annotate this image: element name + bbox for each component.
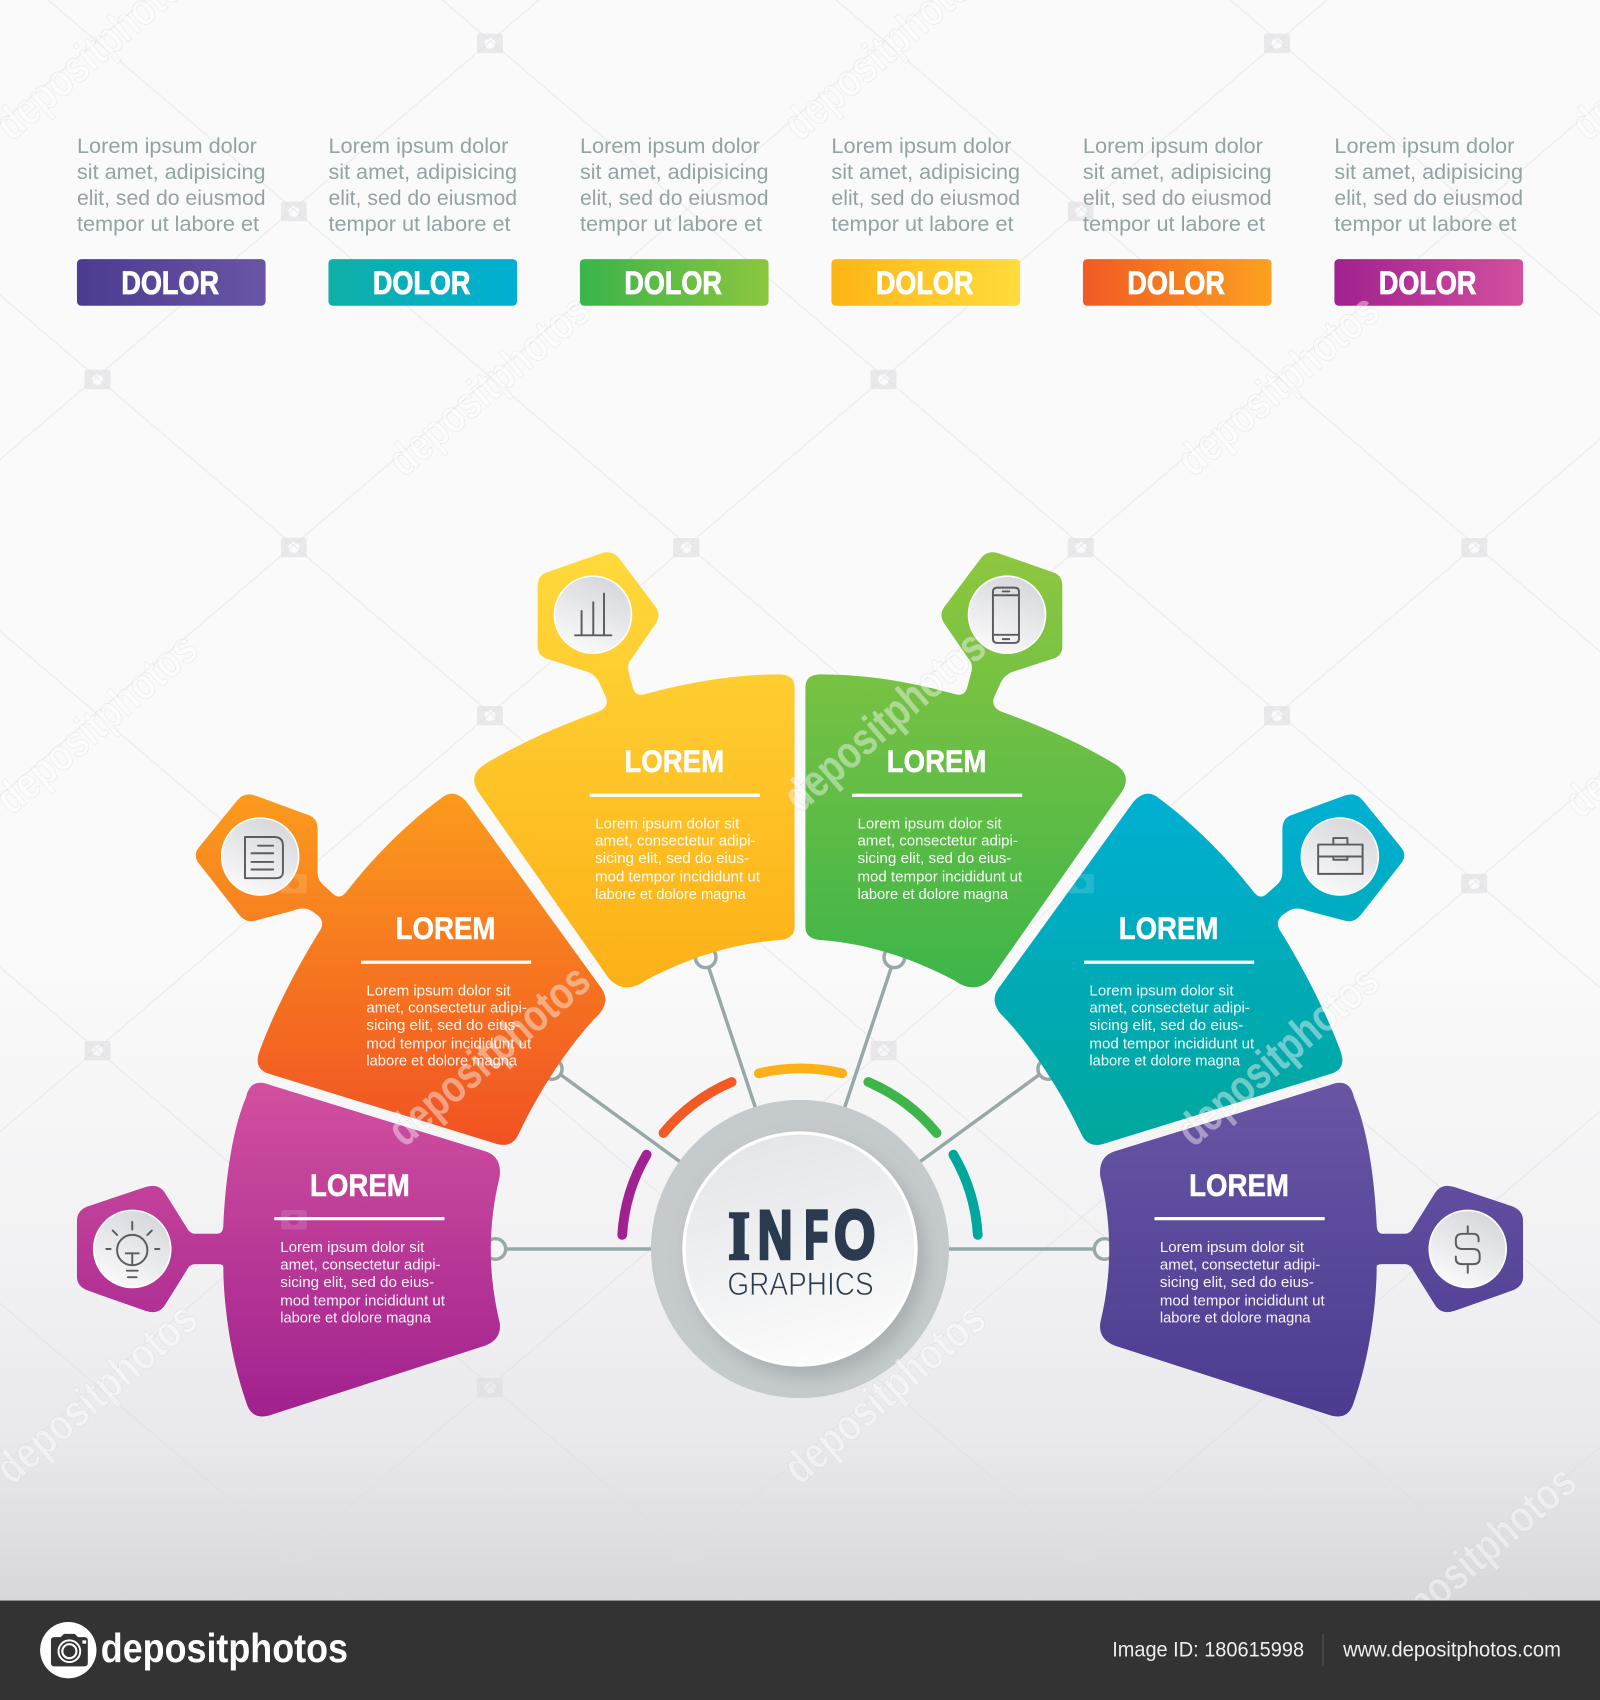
column: dolor teal: elit, sed do eiusmod bbox=[328, 187, 517, 210]
panel: yellow bbox=[474, 552, 795, 987]
watermarks: depositphotos bbox=[1167, 954, 1389, 1156]
panel: magenta bbox=[77, 1083, 500, 1416]
column: dolor magenta: DOLOR bbox=[1379, 265, 1476, 301]
panel: magenta: mod tempor incididunt ut bbox=[280, 1292, 446, 1309]
column: dolor orange bbox=[1083, 135, 1272, 306]
column: dolor teal: sit amet, adipisicing bbox=[328, 161, 517, 184]
panel: yellow: LOREM bbox=[624, 744, 724, 779]
column: dolor yellow: Lorem ipsum dolor bbox=[831, 135, 1011, 158]
column: dolor green: tempor ut labore et bbox=[580, 213, 762, 236]
footer logo: depositphotos bbox=[101, 1625, 348, 1671]
column: dolor orange: DOLOR bbox=[1127, 265, 1225, 301]
column: dolor purple: sit amet, adipisicing bbox=[77, 161, 266, 184]
column: dolor magenta bbox=[1334, 135, 1523, 306]
watermarks: depositphotos bbox=[1167, 284, 1389, 486]
column: dolor green: elit, sed do eiusmod bbox=[580, 187, 769, 210]
panel: yellow: mod tempor incididunt ut bbox=[595, 868, 761, 885]
panel: orange: sicing elit, sed do eius- bbox=[366, 1017, 520, 1034]
panel: green: mod tempor incididunt ut bbox=[857, 868, 1023, 885]
hub title: INFO: O bbox=[834, 1198, 875, 1274]
coloured arcs around hub bbox=[622, 1068, 978, 1235]
panel: yellow: labore et dolore magna bbox=[595, 886, 746, 903]
panel: green: labore et dolore magna bbox=[857, 886, 1009, 903]
column: dolor teal bbox=[328, 135, 517, 306]
column: dolor purple: DOLOR bbox=[121, 265, 219, 301]
panel: orange: LOREM bbox=[396, 911, 495, 946]
panel: purple: labore et dolore magna bbox=[1160, 1310, 1311, 1327]
panel: magenta: amet, consectetur adipi- bbox=[280, 1257, 441, 1274]
column: dolor magenta: tempor ut labore et bbox=[1334, 213, 1517, 236]
column: dolor yellow: tempor ut labore et bbox=[831, 213, 1014, 236]
column: dolor magenta: sit amet, adipisicing bbox=[1334, 161, 1523, 184]
panel: yellow: Lorem ipsum dolor sit bbox=[595, 815, 740, 832]
panel: teal: Lorem ipsum dolor sit bbox=[1089, 982, 1234, 999]
column: dolor purple: Lorem ipsum dolor bbox=[77, 135, 257, 158]
hub subtitle: GRAPHICS: GRAPHICS bbox=[727, 1266, 874, 1302]
watermarks: depositphotos bbox=[378, 954, 600, 1156]
hub title: INFO bbox=[728, 1198, 875, 1274]
column: dolor purple: elit, sed do eiusmod bbox=[77, 187, 266, 210]
centre hub bbox=[651, 1100, 949, 1398]
column: dolor orange: Lorem ipsum dolor bbox=[1083, 135, 1263, 158]
column: dolor purple bbox=[77, 135, 266, 306]
icon: phone bbox=[993, 588, 1019, 643]
panel: purple: mod tempor incididunt ut bbox=[1160, 1292, 1325, 1309]
column: dolor green: sit amet, adipisicing bbox=[580, 161, 769, 184]
panel: magenta: sicing elit, sed do eius- bbox=[280, 1274, 434, 1291]
column: dolor yellow bbox=[831, 135, 1020, 306]
panel: purple: amet, consectetur adipi- bbox=[1160, 1257, 1320, 1274]
panel: green: Lorem ipsum dolor sit bbox=[857, 815, 1002, 832]
hub title: INFO: N bbox=[758, 1198, 792, 1274]
panel: green bbox=[805, 552, 1126, 987]
icon: briefcase bbox=[1318, 838, 1363, 874]
panel: yellow: sicing elit, sed do eius- bbox=[595, 850, 749, 867]
panel: teal: sicing elit, sed do eius- bbox=[1089, 1017, 1243, 1034]
panel: teal: amet, consectetur adipi- bbox=[1089, 1000, 1250, 1017]
panel: magenta: LOREM bbox=[310, 1168, 410, 1203]
icon: dollar bbox=[1456, 1226, 1480, 1273]
footer bar bbox=[0, 1600, 1600, 1700]
column: dolor orange: elit, sed do eiusmod bbox=[1083, 187, 1272, 210]
panel: teal bbox=[995, 794, 1404, 1145]
column: dolor purple: tempor ut labore et bbox=[77, 213, 259, 236]
footer logo bbox=[40, 1622, 348, 1678]
panel: green: LOREM bbox=[887, 744, 986, 779]
column: dolor magenta: elit, sed do eiusmod bbox=[1334, 187, 1523, 210]
footer website: www.depositphotos.com bbox=[1342, 1639, 1561, 1662]
panel: purple: Lorem ipsum dolor sit bbox=[1160, 1239, 1305, 1256]
column: dolor yellow: elit, sed do eiusmod bbox=[831, 187, 1020, 210]
panel: orange bbox=[196, 794, 605, 1145]
footer image id: Image ID: 180615998 bbox=[1112, 1639, 1304, 1662]
hub title: INFO: F bbox=[804, 1198, 828, 1274]
column: dolor teal: DOLOR bbox=[373, 265, 470, 301]
column: dolor teal: tempor ut labore et bbox=[328, 213, 511, 236]
panel: yellow: amet, consectetur adipi- bbox=[595, 833, 756, 850]
column: dolor teal: Lorem ipsum dolor bbox=[328, 135, 508, 158]
panel: orange: mod tempor incididunt ut bbox=[366, 1035, 532, 1052]
watermarks: depositphotos bbox=[773, 620, 995, 822]
panel: teal: mod tempor incididunt ut bbox=[1089, 1035, 1255, 1052]
connector lines and rings bbox=[485, 947, 1115, 1259]
column: dolor orange: sit amet, adipisicing bbox=[1083, 161, 1272, 184]
icon: bar chart bbox=[575, 594, 611, 635]
column: dolor green: Lorem ipsum dolor bbox=[580, 135, 760, 158]
panel: orange: amet, consectetur adipi- bbox=[366, 1000, 527, 1017]
panel: teal: LOREM bbox=[1119, 911, 1218, 946]
column: dolor orange: tempor ut labore et bbox=[1083, 213, 1265, 236]
panel: orange: labore et dolore magna bbox=[366, 1053, 518, 1070]
column: dolor yellow: DOLOR bbox=[876, 265, 973, 301]
column: dolor magenta: Lorem ipsum dolor bbox=[1334, 135, 1514, 158]
hub title: INFO: I bbox=[728, 1198, 750, 1274]
icon: document bbox=[245, 837, 283, 878]
panel: purple: sicing elit, sed do eius- bbox=[1160, 1274, 1314, 1291]
panel: teal: labore et dolore magna bbox=[1089, 1053, 1241, 1070]
panel: green: sicing elit, sed do eius- bbox=[857, 850, 1011, 867]
column: dolor green bbox=[580, 135, 769, 306]
icon: light bulb bbox=[106, 1222, 159, 1277]
panel: purple bbox=[1100, 1083, 1523, 1416]
panel: magenta: labore et dolore magna bbox=[280, 1310, 431, 1327]
panel: green: amet, consectetur adipi- bbox=[857, 833, 1018, 850]
panel: magenta: Lorem ipsum dolor sit bbox=[280, 1239, 425, 1256]
panel: purple: LOREM bbox=[1189, 1168, 1289, 1203]
watermarks: depositphotos bbox=[773, 1292, 995, 1494]
panel: orange: Lorem ipsum dolor sit bbox=[366, 982, 511, 999]
column: dolor yellow: sit amet, adipisicing bbox=[831, 161, 1020, 184]
watermarks: depositphotos bbox=[378, 284, 600, 486]
column: dolor green: DOLOR bbox=[624, 265, 722, 301]
